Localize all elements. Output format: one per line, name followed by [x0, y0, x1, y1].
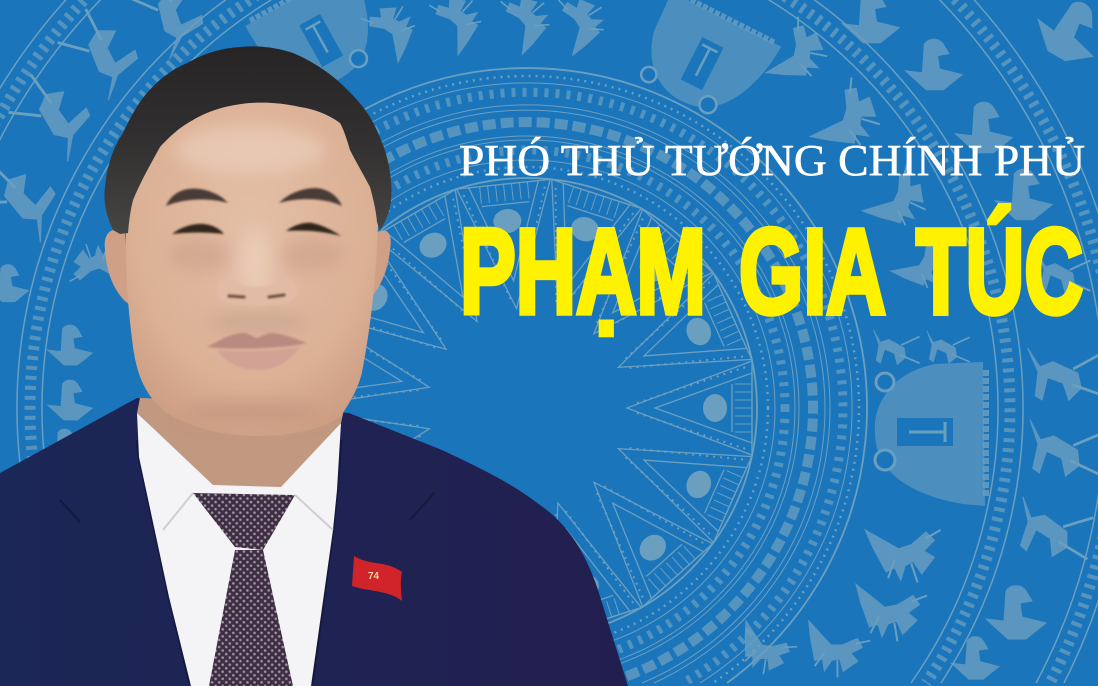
- suit: [0, 398, 628, 686]
- shirt and collar: [137, 413, 341, 686]
- eyes: [172, 223, 341, 236]
- title: name: PHẠM: [460, 203, 706, 339]
- hair: [104, 46, 392, 234]
- brows: [166, 188, 342, 206]
- drum inner band: [187, 68, 867, 683]
- facial shading: [168, 126, 344, 422]
- portrait: [0, 46, 628, 686]
- tie: [193, 493, 295, 686]
- lapel pin flag: [352, 556, 402, 601]
- title: name: GIA: [739, 203, 886, 339]
- title: name: [460, 203, 1083, 339]
- nose: [217, 278, 297, 306]
- drum star triangles: [297, 179, 752, 637]
- face: [126, 100, 378, 436]
- ears: [105, 230, 391, 305]
- lapel pin flag: 74: [368, 571, 380, 582]
- mouth: [207, 333, 307, 370]
- neck: [137, 398, 345, 487]
- title: role: PHÓ THỦ TƯỚNG CHÍNH PHỦ: [459, 136, 1085, 185]
